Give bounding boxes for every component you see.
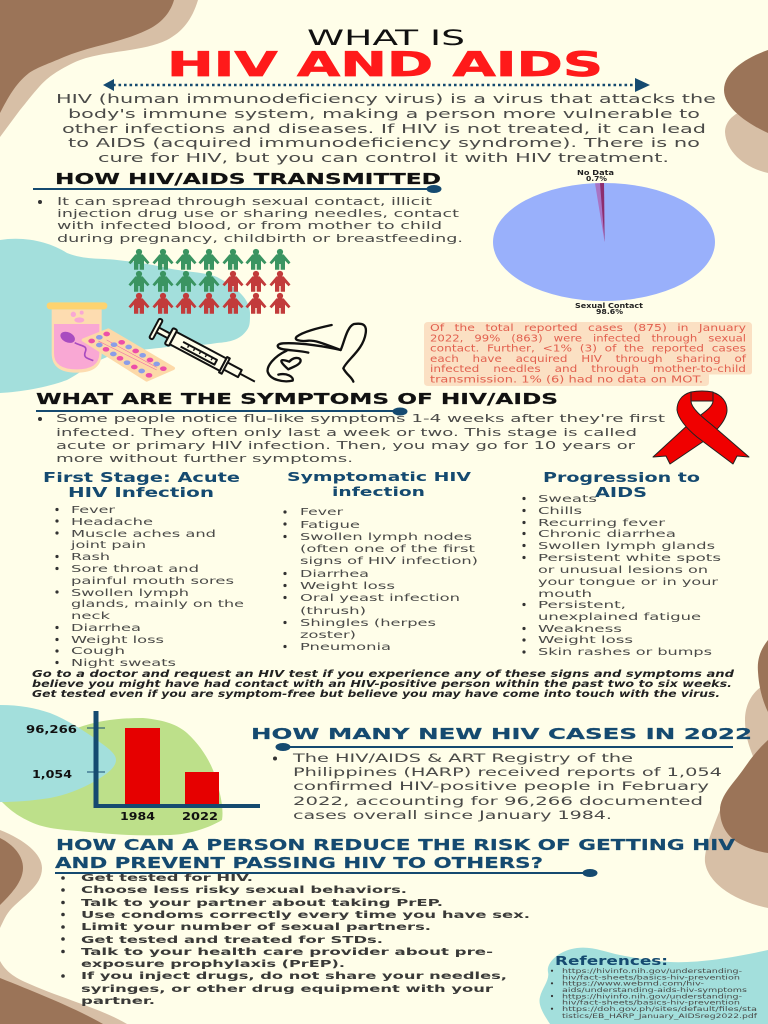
heading: how many new HIV cases in 2022: HOW MANY NEW HIV CASES IN 2022	[251, 725, 752, 743]
list: first stage symptoms: Fever	[71, 505, 115, 516]
list: reference URLs: https://hivinfo.nih.gov/understanding-	[562, 994, 742, 1000]
symptoms intro text block	[38, 412, 666, 465]
list: symptomatic symptoms: signs of HIV infection)	[300, 556, 478, 567]
list: reference URLs: hiv/fact-sheets/basics-hiv-prevention	[562, 974, 740, 982]
list: first stage symptoms: glands, mainly on the	[71, 599, 244, 610]
list: symptomatic symptoms	[283, 507, 478, 653]
decorative teal blob behind illustrations	[0, 239, 250, 393]
list: symptomatic symptoms: Fatigue	[300, 520, 360, 531]
list: first stage symptoms: Swollen lymph	[71, 588, 189, 599]
text block: new cases	[273, 751, 722, 822]
list: prevention measures: partner.	[81, 996, 155, 1007]
icon: pregnant woman line art	[268, 324, 366, 382]
pie chart: transmission mode: Sexual Contact	[575, 301, 644, 310]
callout: reported cases by mode of transmission: contact. Further, <1% (3) of the reported cases	[430, 344, 746, 354]
text block: advice to get tested	[32, 669, 734, 700]
title	[167, 26, 603, 85]
list: progression symptoms: Chronic diarrhea	[538, 529, 676, 540]
list: progression symptoms: Weakness	[538, 624, 622, 635]
list: progression symptoms: Recurring fever	[538, 518, 665, 529]
list: reference URLs: aids/understanding-aids-hiv-symptoms	[562, 987, 747, 994]
list: progression symptoms: Chills	[538, 506, 582, 517]
symptoms intro text block: infected. They often only last a week or two. This stage is called	[56, 426, 637, 439]
list: symptomatic symptoms: (thrush)	[300, 606, 366, 617]
list: reference URLs: tistics/EB_HARP_January_AIDSreg2022.pdf	[562, 1013, 758, 1020]
heading: references: References:	[555, 953, 668, 968]
panel: references	[539, 948, 768, 1024]
intro text block	[56, 91, 716, 165]
intro text block: cure for HIV, but you can control it with HIV treatment.	[98, 150, 669, 165]
list: first stage symptoms	[55, 505, 244, 669]
heading: how many new HIV cases in 2022	[251, 725, 752, 751]
icon: red awareness ribbon	[653, 391, 749, 464]
text block: advice to get tested: believe you might have had contact with an HIV-positive person within the past two to six weeks.	[32, 679, 732, 690]
transmission text block: during pregnancy, childbirth or breastfeeding.	[57, 233, 463, 245]
list: prevention measures: Get tested and treated for STDs.	[81, 935, 383, 946]
list: progression symptoms: Skin rashes or bumps	[538, 647, 712, 658]
list: first stage symptoms: neck	[71, 611, 111, 622]
list: reference URLs: https://hivinfo.nih.gov/understanding-	[562, 968, 742, 975]
list: reference URLs: hiv/fact-sheets/basics-hiv-prevention	[562, 1000, 740, 1006]
title: WHAT IS	[307, 26, 465, 50]
list: symptomatic symptoms: Swollen lymph nodes	[300, 532, 472, 543]
list: first stage symptoms: Rash	[71, 552, 110, 563]
symptoms intro text block: more without further symptoms.	[56, 452, 353, 465]
list: first stage symptoms: Headache	[71, 517, 153, 528]
heading: how HIV/AIDS transmitted: HOW HIV/AIDS TRANSMITTED	[55, 170, 441, 188]
list: first stage symptoms: Weight loss	[71, 635, 164, 646]
callout: reported cases by mode of transmission: transmission. 1% (6) had no data on MOT.	[430, 374, 703, 386]
list: reference URLs	[551, 968, 758, 1020]
heading: how to reduce the risk: HOW CAN A PERSON REDUCE THE RISK OF GETTING HIV	[56, 836, 735, 854]
heading: how to reduce the risk: AND PREVENT PASSING HIV TO OTHERS?	[55, 854, 543, 872]
heading: how HIV/AIDS transmitted	[33, 170, 442, 193]
transmission text block: It can spread through sexual contact, illicit	[57, 196, 432, 208]
list: prevention measures: Get tested for HIV.	[81, 873, 253, 884]
intro text block: to AIDS (acquired immunodeficiency syndrome). There is no	[68, 135, 700, 150]
list: first stage symptoms: painful mouth sores	[71, 576, 234, 587]
intro text block: HIV (human immunodeficiency virus) is a virus that attacks the	[56, 91, 716, 106]
list: prevention measures: Limit your number of sexual partners.	[81, 922, 431, 933]
list: progression symptoms: Weight loss	[538, 635, 633, 646]
heading: symptomatic HIV infection	[287, 470, 471, 500]
pie chart: transmission mode: 0.7%	[586, 174, 607, 183]
panel: progression to AIDS	[522, 471, 721, 658]
panel: symptomatic HIV infection	[283, 470, 478, 653]
decorative shape: right-side brown blob	[705, 640, 768, 908]
text block: new cases: confirmed HIV-positive people in February	[293, 779, 709, 793]
decorative shape: bottom-left brown blobs	[0, 830, 127, 1024]
transmission text block	[38, 196, 463, 245]
heading: first stage: HIV Infection	[68, 486, 214, 501]
icon: syringe	[149, 318, 260, 391]
list: prevention measures: Choose less risky sexual behaviors.	[81, 885, 407, 896]
callout: reported cases by mode of transmission	[424, 322, 752, 386]
callout: reported cases by mode of transmission: 2022, 99% (863) were infected through sexual	[430, 334, 746, 344]
title: HIV AND AIDS	[167, 45, 603, 85]
transmission text block: injection drug use or sharing needles, contact	[57, 208, 459, 220]
pictogram: people grid	[128, 249, 290, 314]
list: symptomatic symptoms: zoster)	[300, 630, 356, 641]
heading: how to reduce the risk	[55, 836, 735, 877]
text block: new cases: cases overall since January 1984.	[293, 808, 612, 822]
list: progression symptoms	[522, 494, 721, 658]
heading: first stage: First Stage: Acute	[43, 471, 240, 486]
list: symptomatic symptoms: Shingles (herpes	[300, 618, 436, 629]
list: prevention measures: exposure prophylaxis (PrEP).	[81, 959, 345, 970]
list: prevention measures: syringes, or other drug equipment with your	[81, 984, 493, 995]
text block: new cases: Philippines (HARP) received reports of 1,054	[293, 765, 722, 779]
transmission text block: with infected blood, or from mother to child	[57, 220, 442, 232]
bar chart: HIV cases 1984 vs 2022	[0, 705, 260, 835]
text block: advice to get tested: Get tested even if you are symptom-free but believe you may have come into touch with the virus.	[32, 689, 720, 700]
symptoms intro text block: acute or primary HIV infection. Then, you may go for 10 years or	[56, 439, 636, 452]
list: symptomatic symptoms: (often one of the first	[300, 544, 475, 555]
pie chart: transmission mode: 98.6%	[596, 307, 623, 316]
icon: test tube with sperm cell	[47, 302, 107, 373]
text block: advice to get tested: Go to a doctor and request an HIV test if you experience any of these signs and symptoms and	[32, 669, 734, 680]
heading: first stage	[43, 471, 240, 501]
list: first stage symptoms: Diarrhea	[71, 623, 141, 634]
intro text block: body's immune system, making a person more vulnerable to	[68, 106, 700, 121]
heading: progression to AIDS: Progression to	[543, 471, 700, 486]
pie chart: transmission mode: No Data	[577, 168, 614, 177]
list: symptomatic symptoms: Oral yeast infection	[300, 593, 460, 604]
bar chart: HIV cases 1984 vs 2022: 1,054	[32, 768, 73, 781]
icon: contraceptive pill pack	[83, 330, 173, 380]
callout: reported cases by mode of transmission: infected needles and through mother-to-child	[430, 364, 746, 375]
bar chart: HIV cases 1984 vs 2022: 96,266	[26, 723, 77, 736]
list: first stage symptoms: Night sweats	[71, 658, 176, 669]
list: progression symptoms: your tongue or in your	[538, 577, 718, 588]
list: progression symptoms: Persistent,	[538, 600, 626, 611]
list: progression symptoms: Swollen lymph glands	[538, 541, 715, 552]
list: prevention measures: Use condoms correctly every time you have sex.	[81, 910, 530, 921]
list: progression symptoms: Sweats	[538, 494, 597, 505]
list: first stage symptoms: Cough	[71, 646, 125, 657]
text block: new cases: The HIV/AIDS & ART Registry of the	[291, 751, 633, 765]
list: reference URLs: https://doh.gov.ph/sites/default/files/sta	[562, 1006, 757, 1013]
symptoms intro text block: Some people notice flu-like symptoms 1-4 weeks after they're first	[56, 412, 666, 425]
heading: progression to AIDS: AIDS	[595, 486, 647, 501]
text block: new cases: 2022, accounting for 96,266 documented	[293, 794, 703, 808]
panel: first stage symptoms	[43, 471, 244, 669]
bar chart: HIV cases 1984 vs 2022: 1984	[120, 810, 156, 823]
list: first stage symptoms: joint pain	[69, 540, 146, 551]
heading: progression to AIDS	[543, 471, 700, 501]
heading: symptomatic HIV infection: Symptomatic HIV	[287, 470, 471, 485]
list: prevention measures: Talk to your partner about taking PrEP.	[81, 898, 443, 909]
list: prevention measures	[61, 873, 530, 1007]
decorative shape: top-right brown blob	[724, 50, 768, 173]
arrow: double-headed dotted divider	[103, 78, 650, 92]
list: symptomatic symptoms: Diarrhea	[300, 569, 369, 580]
list: progression symptoms: Persistent white spots	[538, 553, 721, 564]
list: prevention measures: If you inject drugs, do not share your needles,	[81, 971, 507, 982]
heading: symptoms of HIV/AIDS: WHAT ARE THE SYMPTOMS OF HIV/AIDS	[36, 390, 558, 408]
list: first stage symptoms: Muscle aches and	[71, 529, 216, 540]
list: progression symptoms: mouth	[538, 589, 592, 600]
list: progression symptoms: unexplained fatigue	[538, 612, 701, 623]
list: progression symptoms: or unusual lesions on	[538, 565, 708, 576]
intro text block: other infections and diseases. If HIV is not treated, it can lead	[62, 121, 706, 136]
list: symptomatic symptoms: Weight loss	[300, 581, 395, 592]
pie chart: transmission mode	[493, 168, 715, 316]
list: symptomatic symptoms: Pneumonia	[300, 642, 391, 653]
callout: reported cases by mode of transmission: each have acquired HIV through sharing of	[430, 354, 747, 365]
heading: symptoms of HIV/AIDS	[36, 390, 558, 416]
list: first stage symptoms: Sore throat and	[71, 564, 199, 575]
callout: reported cases by mode of transmission: Of the total reported cases (875) in January	[430, 323, 746, 334]
list: prevention measures: Talk to your health care provider about pre-	[81, 947, 493, 958]
decorative shape: top-left brown blob	[0, 0, 198, 137]
heading: symptomatic HIV infection: infection	[332, 485, 425, 500]
list: symptomatic symptoms: Fever	[300, 507, 343, 518]
list: reference URLs: https://www.webmd.com/hiv-	[562, 980, 704, 988]
bar chart: HIV cases 1984 vs 2022: 2022	[182, 810, 218, 823]
